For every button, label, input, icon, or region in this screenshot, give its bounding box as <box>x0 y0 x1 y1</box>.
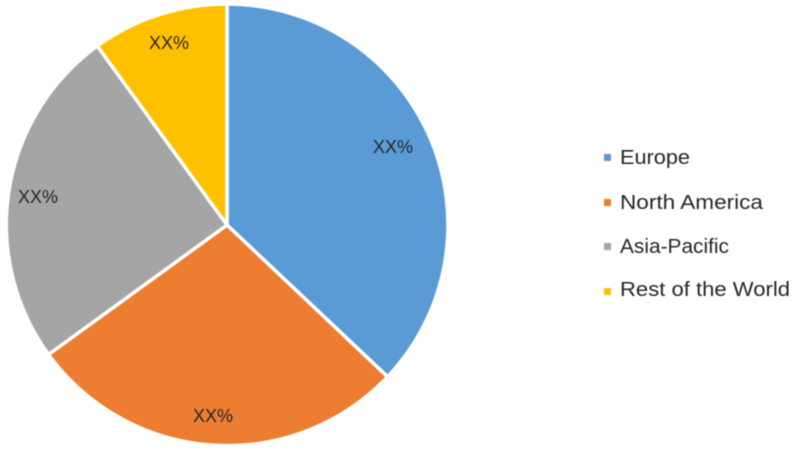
legend <box>604 147 790 301</box>
value label: North America: XX% <box>193 406 233 426</box>
slice: Rest of the World <box>97 4 227 225</box>
slice: North America <box>48 225 388 446</box>
pie chart <box>6 4 448 446</box>
value label: Europe: XX% <box>373 137 413 157</box>
legend item: Asia-Pacific: Asia-Pacific <box>620 236 729 258</box>
legend item: Rest of the World: Rest of the World <box>620 279 790 301</box>
legend item: North America: North America <box>620 192 764 214</box>
value label: Rest of the World: XX% <box>149 33 189 53</box>
value label: Asia-Pacific: XX% <box>18 187 58 207</box>
legend item: Europe: Europe <box>620 147 690 169</box>
slice: Europe <box>227 4 448 377</box>
slice: Asia-Pacific <box>6 46 227 354</box>
